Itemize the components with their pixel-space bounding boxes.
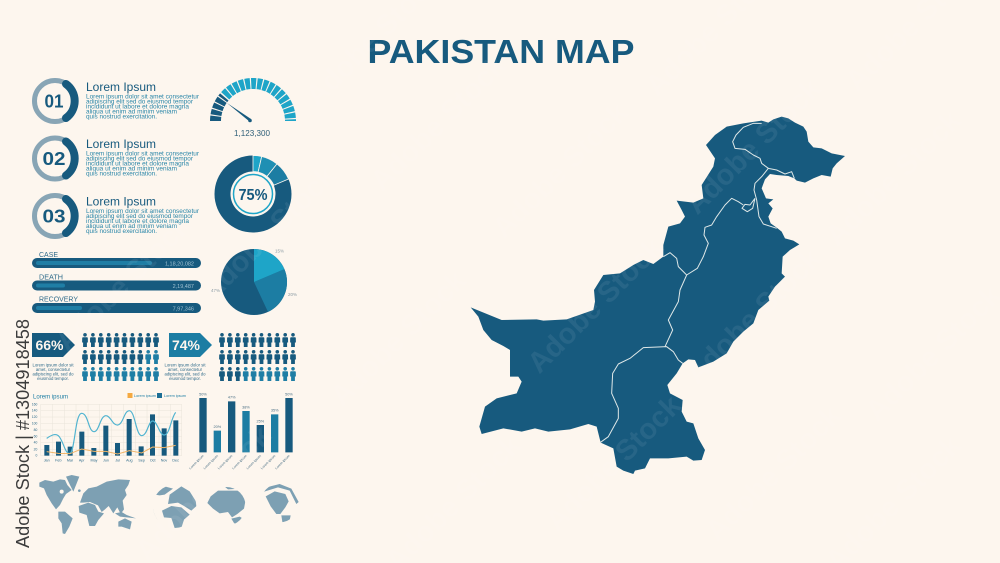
y axis labels xyxy=(32,402,37,458)
y axis labels: 0 xyxy=(35,454,37,458)
province borders xyxy=(600,123,794,443)
people icons 66% xyxy=(82,333,159,381)
step 02 xyxy=(34,138,199,179)
caption 74%: Lorem ipsum dolor sit xyxy=(164,362,206,368)
x axis labels: May xyxy=(91,458,98,462)
watermarks: Adobe Stock xyxy=(50,209,198,358)
donut label: 75% xyxy=(238,187,268,204)
stat 66% xyxy=(32,333,159,381)
body 02: aliqua ut enim ad minim veniam xyxy=(86,166,177,172)
watermarks: Adobe Stock xyxy=(195,159,343,308)
caption 74% xyxy=(164,362,206,381)
body 02: adipiscing elit sed do eiusmod tempor xyxy=(86,156,193,162)
x axis labels: Nov xyxy=(161,458,167,462)
x axis labels: Feb xyxy=(55,458,61,462)
arrow 74%: 74% xyxy=(172,337,201,353)
gauge ticks: dark xyxy=(216,97,224,121)
y axis labels: 100 xyxy=(32,422,37,426)
y axis labels: 60 xyxy=(34,434,37,438)
gauge needle xyxy=(227,103,252,122)
bar: case: CASE xyxy=(39,252,58,259)
stat 74% xyxy=(164,333,296,381)
world map xyxy=(39,475,136,534)
legend: Lorem ipsum xyxy=(134,394,156,398)
columns xyxy=(199,398,293,452)
caption 74%: adipiscing elit, sed do xyxy=(164,372,206,376)
title: PAKISTAN MAP xyxy=(368,33,634,70)
heading 03: Lorem Ipsum xyxy=(86,196,156,208)
rotated labels: Lorem ipsum xyxy=(217,454,234,470)
ring 03 xyxy=(34,196,76,236)
watermarks: Adobe Stock xyxy=(325,264,473,413)
caption 66%: amet, consectetur xyxy=(36,367,71,372)
bar: recovery: RECOVERY xyxy=(39,296,78,304)
bar: death: 2,19,487 xyxy=(173,284,194,290)
body 03: incididunt ut labore et dolore magna xyxy=(86,218,190,225)
grid xyxy=(41,404,182,456)
body 01: adipiscing elit sed do eiusmod tempor xyxy=(86,98,193,106)
body 03: Lorem ipsum dolor sit amet consectetur xyxy=(86,208,199,215)
x axis labels: Dec xyxy=(172,458,179,462)
x axis labels: Aug xyxy=(126,458,133,462)
value labels: 38% xyxy=(242,405,250,409)
y axis labels: 20 xyxy=(34,447,37,451)
y axis labels: 40 xyxy=(34,441,37,445)
body 02: incididunt ut labore et dolore magna xyxy=(86,160,190,168)
value labels: 20% xyxy=(213,425,222,429)
y axis labels: 80 xyxy=(34,428,37,432)
rotated labels: Lorem ipsum xyxy=(231,454,248,470)
value labels: 50% xyxy=(199,393,207,397)
x axis labels xyxy=(44,458,179,462)
bar: death xyxy=(32,274,201,290)
arrow 66%: 66% xyxy=(35,337,64,353)
donut segments xyxy=(253,156,288,185)
globe: Americas xyxy=(264,484,299,522)
body 03: aliqua ut enim ad minim veniam xyxy=(86,223,177,230)
heading 01: Lorem Ipsum xyxy=(86,82,156,94)
rotated labels xyxy=(188,454,291,470)
legend: Lorem ipsum xyxy=(164,394,186,398)
watermarks: Adobe Stock xyxy=(700,399,848,548)
value labels: 47% xyxy=(228,396,236,400)
pie labels: 20% xyxy=(288,292,297,297)
y axis labels: 140 xyxy=(32,409,37,413)
progress bars xyxy=(32,252,201,313)
step 01 xyxy=(34,80,199,122)
body 01: Lorem ipsum dolor sit amet consectetur xyxy=(86,94,199,100)
watermarks: Adobe Stock xyxy=(365,49,513,198)
bar: recovery: 7,97,346 xyxy=(173,306,194,312)
globe: Asia xyxy=(208,487,246,524)
map: Pakistan xyxy=(471,117,845,474)
body 02 xyxy=(86,150,199,178)
body 01: incididunt ut labore et dolore magna xyxy=(86,104,190,110)
orange line xyxy=(47,445,176,454)
body 01: quis nostrud exercitation. xyxy=(86,114,157,120)
x axis labels: Jun xyxy=(103,458,109,462)
legend xyxy=(128,393,186,398)
caption 66%: adipiscing elit, sed do xyxy=(32,372,74,376)
x axis labels: Sep xyxy=(138,458,145,462)
caption 74%: amet, consectetur xyxy=(168,367,203,372)
watermarks: Adobe Stock xyxy=(680,242,828,391)
body 03: adipiscing elit sed do eiusmod tempor xyxy=(86,213,193,220)
rotated labels: Lorem ipsum xyxy=(246,454,262,470)
x axis labels: Jan xyxy=(44,458,50,462)
value labels: 35% xyxy=(271,409,279,413)
bar: recovery xyxy=(32,296,201,313)
columns xyxy=(44,414,178,456)
body 01 xyxy=(86,94,199,120)
gauge value: 1,123,300 xyxy=(234,129,271,138)
y axis labels: 160 xyxy=(32,402,37,406)
value labels: 50% xyxy=(285,393,293,397)
pie chart xyxy=(211,248,297,315)
pie labels: 47% xyxy=(211,288,220,293)
bar: case xyxy=(32,252,201,268)
bar: case: 1,18,20,082 xyxy=(165,262,194,268)
combo chart xyxy=(32,393,186,462)
ring 02 xyxy=(34,138,76,179)
globes xyxy=(152,484,299,528)
gauge ticks: light xyxy=(225,83,291,121)
x axis labels: Mar xyxy=(67,458,74,462)
rotated labels: Lorem ipsum xyxy=(188,454,205,470)
heading 02: Lorem Ipsum xyxy=(86,139,156,151)
caption 74%: eiusmod tempor. xyxy=(169,376,201,381)
pie labels: 15% xyxy=(275,248,284,254)
chart title: Lorem ipsum xyxy=(33,394,68,400)
people icons 74% xyxy=(219,333,296,381)
y axis labels: 120 xyxy=(32,415,37,419)
watermarks: Adobe Stock xyxy=(540,389,688,538)
x axis labels: Jul xyxy=(115,458,120,462)
column chart xyxy=(188,393,293,470)
watermarks: Adobe Stock xyxy=(820,104,968,253)
globe: Africa and Europe xyxy=(152,486,198,528)
number 03: 03 xyxy=(42,206,66,226)
caption 66%: Lorem ipsum dolor sit xyxy=(32,362,74,368)
x axis labels: Apr xyxy=(79,458,85,462)
pie labels xyxy=(211,248,297,297)
caption 66%: eiusmod tempor. xyxy=(37,376,69,381)
watermarks: Adobe Stock xyxy=(487,96,635,245)
body 03 xyxy=(86,208,199,235)
number 02: 02 xyxy=(42,149,66,169)
body 02: Lorem ipsum dolor sit amet consectetur xyxy=(86,150,199,158)
number 01: 01 xyxy=(44,92,64,112)
body 03: quis nostrud exercitation. xyxy=(86,228,157,235)
watermarks: Adobe Stock xyxy=(680,72,828,221)
blue line xyxy=(47,411,176,453)
rotated labels: Lorem ipsum xyxy=(274,454,291,470)
bar: death: DEATH xyxy=(39,274,63,282)
body 01: aliqua ut enim ad minim veniam xyxy=(86,108,177,116)
watermarks: Adobe Stock xyxy=(522,231,670,380)
value labels: 25% xyxy=(256,419,265,423)
gauge xyxy=(216,83,291,138)
caption 66% xyxy=(32,362,74,381)
donut chart 75% xyxy=(214,156,292,232)
rotated labels: Lorem ipsum xyxy=(203,454,219,470)
x axis labels: Oct xyxy=(150,458,156,462)
ring 01 xyxy=(34,80,76,122)
step 03 xyxy=(34,196,199,236)
rotated labels: Lorem ipsum xyxy=(260,454,277,470)
body 02: quis nostrud exercitation. xyxy=(86,170,157,178)
stock credit: Adobe Stock | #1304918458 xyxy=(13,319,33,548)
value labels xyxy=(199,393,293,429)
